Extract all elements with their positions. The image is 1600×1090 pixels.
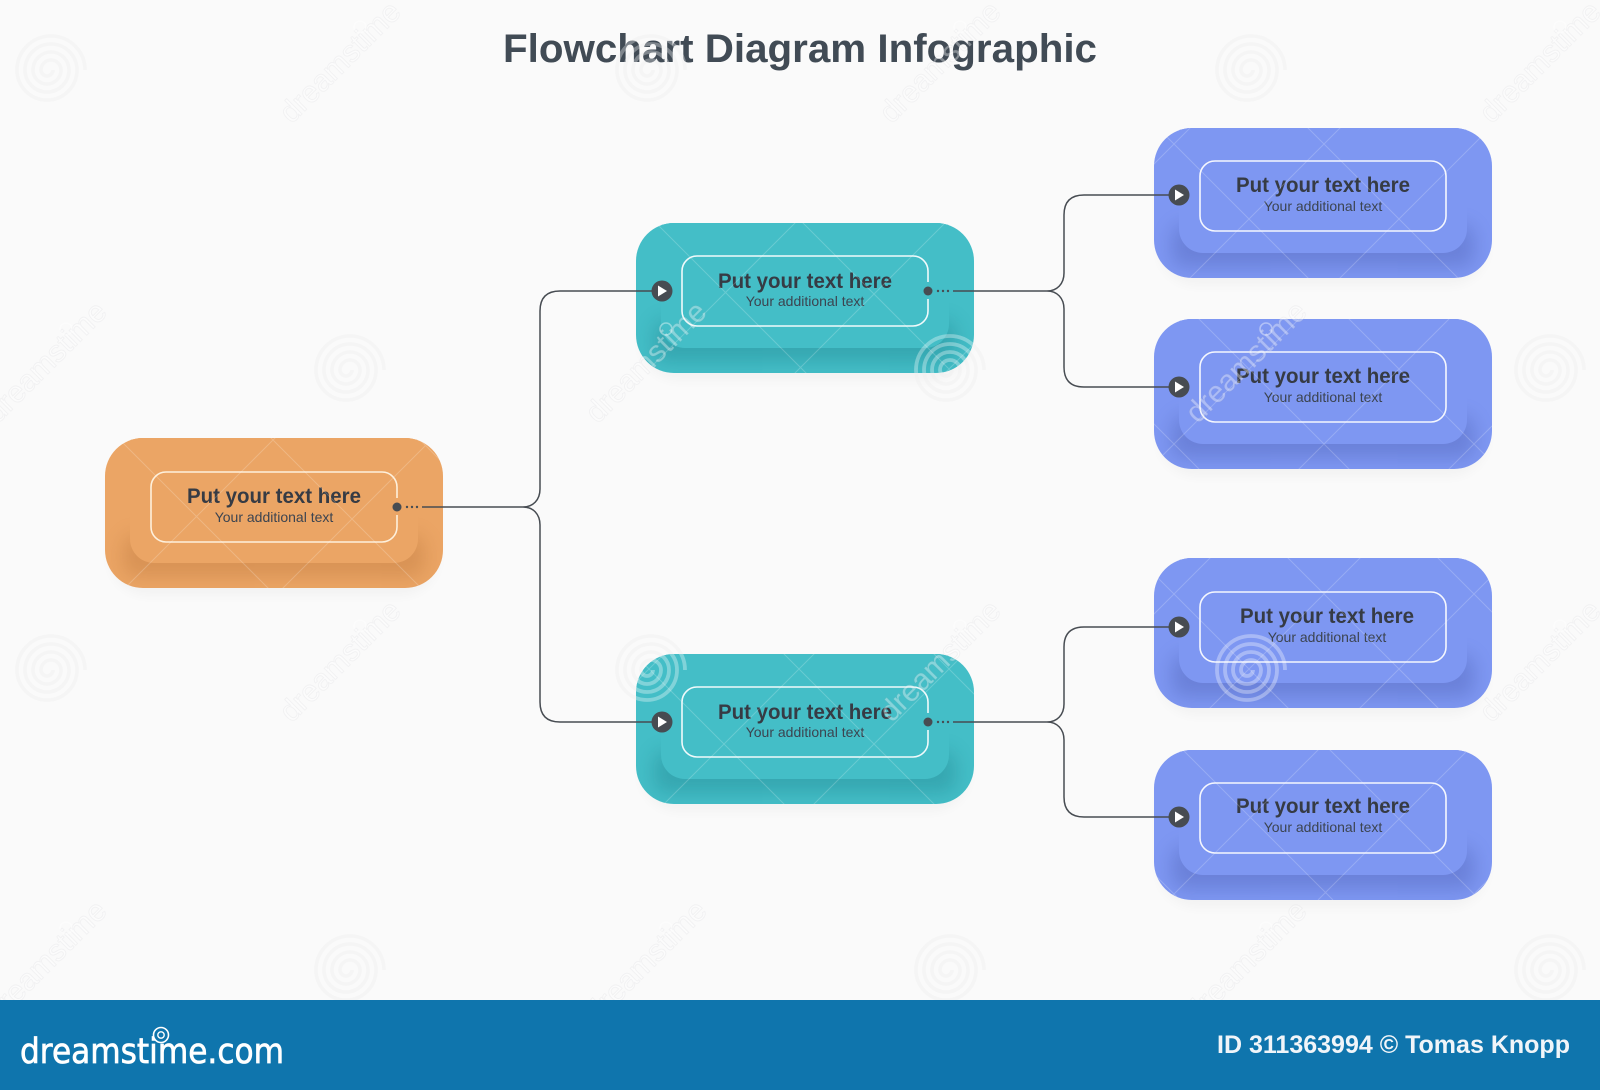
output dot [392, 502, 418, 512]
panel: teal card lower: Put your text here [718, 701, 892, 724]
input play icon [652, 280, 672, 302]
panel: blue card 4 [1154, 750, 1492, 900]
panel: blue card 1: Your additional text [1264, 198, 1382, 214]
panel: teal card lower: Your additional text [746, 724, 864, 740]
panel: orange root card: Put your text here [187, 485, 361, 508]
icon: logo spiral [154, 1028, 168, 1042]
icon: play marker blue card 1 [1168, 184, 1190, 206]
panel: orange root card [105, 438, 443, 588]
watermark: diagonal dreamstime text: dreamstime [579, 295, 713, 429]
panel: blue card 2: Your additional text [1264, 389, 1382, 405]
watermark: diagonal dreamstime text: dreamstime [873, 594, 1007, 728]
panel: blue card 4: Put your text here [1236, 795, 1410, 818]
panel: blue card 4: Your additional text [1264, 819, 1382, 835]
icon: play marker blue card 4 [1168, 806, 1190, 828]
panel: blue card 3 [1154, 558, 1492, 708]
footer bar [0, 1000, 1600, 1090]
watermark: diagonal dreamstime text: dreamstime [273, 594, 407, 728]
watermark: diagonal dreamstime text: dreamstime [1179, 894, 1313, 1028]
connector: lower teal to blue cards [953, 627, 1170, 817]
title: Flowchart Diagram Infographic [503, 27, 1097, 71]
panel: teal card upper: Your additional text [746, 293, 864, 309]
panel: teal card lower [636, 654, 974, 804]
panel: blue card 2: Put your text here [1236, 365, 1410, 388]
footer logo: dreamstime.com [20, 1032, 284, 1072]
panel: blue card 3: Put your text here [1240, 605, 1414, 628]
icon: play marker blue card 3 [1168, 616, 1190, 638]
connector: root to level two [422, 291, 652, 722]
output dot [924, 286, 949, 296]
panel: blue card 1: Put your text here [1236, 174, 1410, 197]
watermark: diagonal dreamstime text: dreamstime [579, 894, 713, 1028]
watermark: diagonal lines on cards [123, 128, 1492, 900]
input play icon [652, 712, 672, 732]
footer credit: ID 311363994 © Tomas Knopp [1217, 1031, 1570, 1059]
connector: upper teal to blue cards [953, 195, 1170, 387]
panel: orange root card: Your additional text [215, 509, 333, 525]
watermark: small spiral marks beside text [60, 21, 1566, 934]
icon: play marker blue card 2 [1168, 376, 1190, 398]
panel: teal card upper [636, 223, 974, 373]
panel: blue card 1 [1154, 128, 1492, 278]
panel: blue card 2 [1154, 319, 1492, 469]
watermark: diagonal dreamstime text: dreamstime [1179, 295, 1313, 429]
output dot [924, 718, 949, 726]
panel: blue card 3: Your additional text [1268, 629, 1386, 645]
panel: teal card upper: Put your text here [718, 270, 892, 293]
